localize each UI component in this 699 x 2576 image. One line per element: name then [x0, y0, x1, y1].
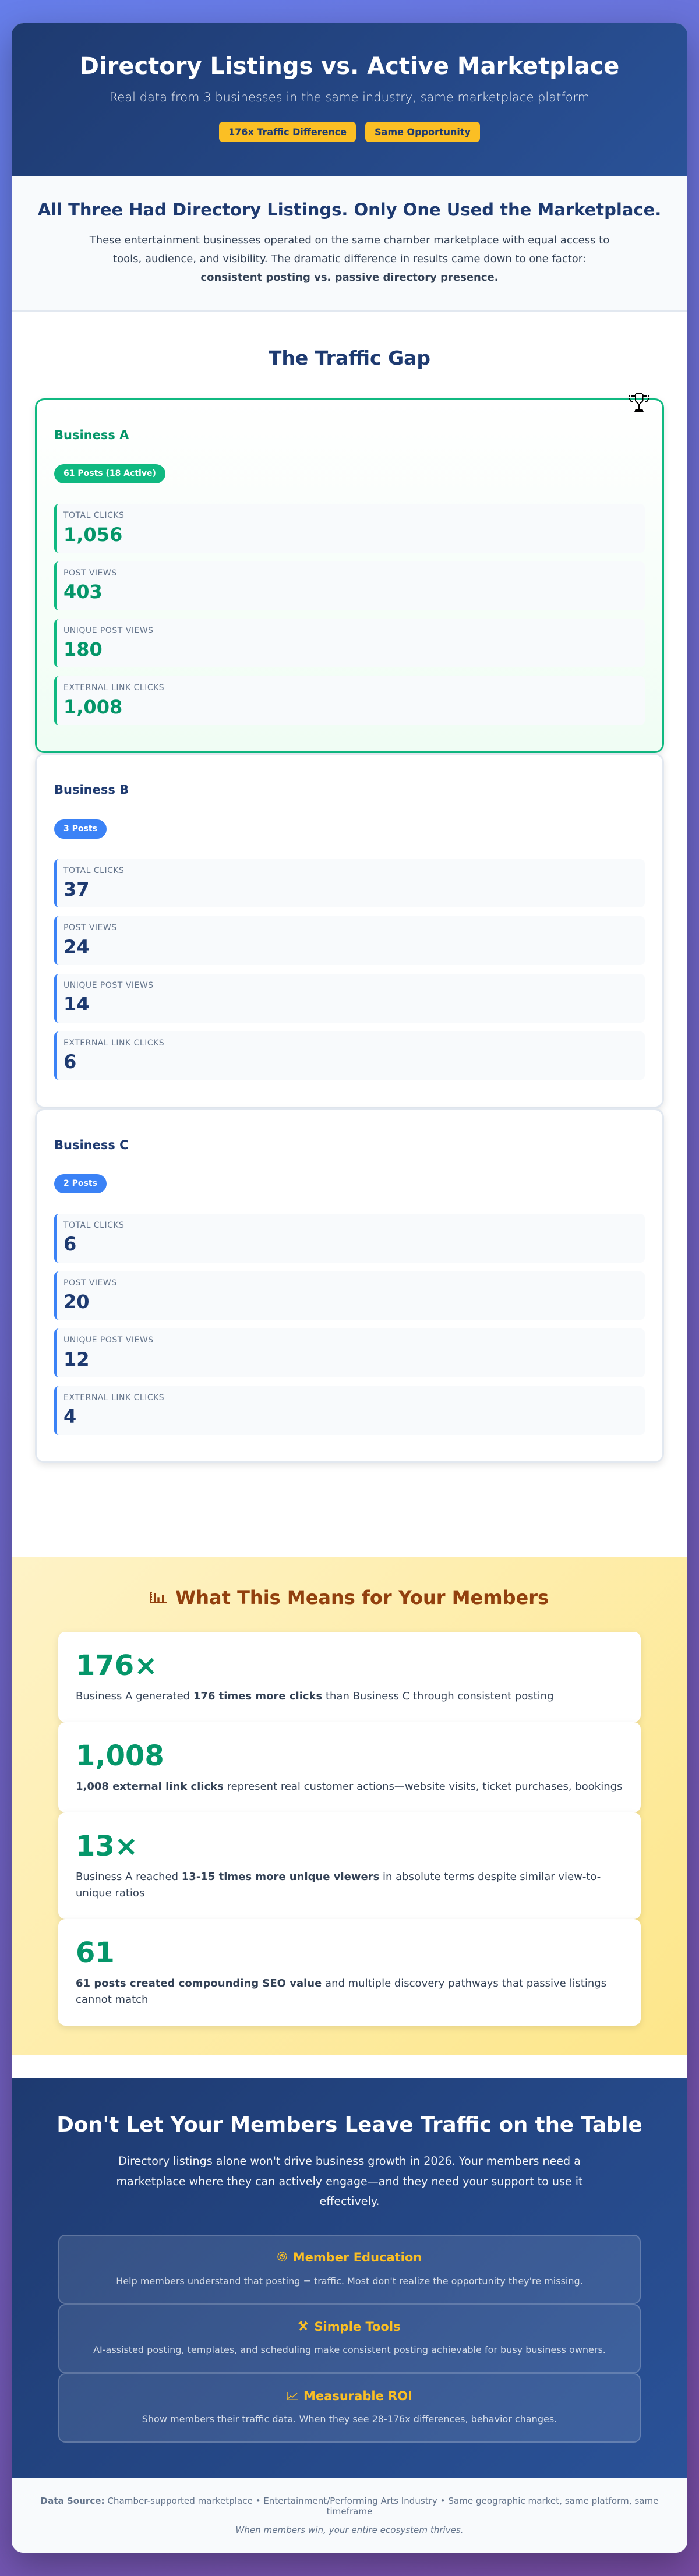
- intro heading: All Three Had Directory Listings. Only One Used the Marketplace.: [38, 200, 661, 220]
- metric: total clicks: [54, 504, 645, 553]
- action: member education: [58, 2235, 641, 2304]
- metric: total clicks: 1,056: [63, 524, 122, 546]
- subtitle: Real data from 3 businesses in the same industry, same marketplace platform: [110, 90, 589, 104]
- card: business A: [35, 398, 664, 753]
- metric: total clicks: TOTAL CLICKS: [63, 511, 124, 520]
- intro text: These entertainment businesses operated on the same chamber marketplace with equal access to: [90, 234, 609, 246]
- business A metrics: [54, 504, 164, 725]
- business B name: Business B: [54, 783, 129, 797]
- insight: 13x: [58, 1812, 641, 1919]
- intro text: consistent posting vs. passive directory presence.: [200, 271, 499, 284]
- business B post badge: [54, 819, 107, 839]
- CTA text: effectively.: [320, 2195, 379, 2208]
- CTA text: Directory listings alone won't drive business growth in 2026. Your members need a: [118, 2154, 581, 2168]
- metric: external link clicks: [54, 676, 645, 725]
- metric: unique post views: [54, 619, 645, 667]
- CTA text: marketplace where they can actively engage—and they need your support to use it: [116, 2175, 583, 2188]
- metric: post views: 403: [63, 581, 103, 603]
- metric: total clicks: TOTAL CLICKS: [63, 1221, 124, 1230]
- tag: traffic difference: 176x Traffic Difference: [228, 126, 347, 137]
- tag: same opportunity: [365, 122, 480, 142]
- panel: what this means: [12, 1557, 687, 2055]
- business B post badge: 3 Posts: [63, 824, 97, 833]
- business A post badge: 61 Posts (18 Active): [63, 469, 156, 478]
- metric: total clicks: [54, 1214, 645, 1263]
- business C post badge: 2 Posts: [63, 1179, 97, 1188]
- stat description: unique ratios: [76, 1887, 144, 1899]
- stat description: Business A generated 176 times more clicks than Business C through consistent posting: [76, 1690, 554, 1702]
- section heading with chart icon: What This Means for Your Members: [175, 1586, 549, 1609]
- business C name: Business C: [54, 1138, 129, 1152]
- stat description: cannot match: [76, 1994, 148, 2006]
- metric: unique post views: 14: [63, 993, 90, 1015]
- metric: unique post views: 12: [63, 1348, 90, 1370]
- tag: same opportunity: Same Opportunity: [375, 126, 471, 137]
- intro text: [90, 234, 609, 284]
- metric: unique post views: [54, 1328, 645, 1377]
- data source: Data Source: Chamber-supported marketplace • Entertainment/Performing Arts Industry • Same geographic market, same platform, same: [41, 2496, 658, 2506]
- action text: AI-assisted posting, templates, and scheduling make consistent posting achievable for busy business owners.: [93, 2344, 606, 2355]
- closing line: When members win, your entire ecosystem thrives.: [235, 2525, 464, 2535]
- metric: external link clicks: 6: [63, 1051, 76, 1073]
- metric: external link clicks: [54, 1386, 645, 1435]
- action text: Help members understand that posting = traffic. Most don't realize the opportunity they're missing.: [116, 2275, 583, 2287]
- stat description: [76, 1871, 601, 1899]
- metric: total clicks: TOTAL CLICKS: [63, 866, 124, 875]
- stat: 1,008: [76, 1740, 164, 1772]
- panel: call to action: [12, 2078, 687, 2478]
- action title with growth chart icon: Measurable ROI: [303, 2389, 412, 2403]
- metric: external link clicks: [54, 1031, 645, 1080]
- footer: [12, 2478, 687, 2553]
- insight: 61: [58, 1919, 641, 2026]
- metric: total clicks: 37: [63, 878, 90, 900]
- business A post badge: [54, 464, 165, 483]
- CTA text: [116, 2154, 583, 2208]
- CTA heading: Don't Let Your Members Leave Traffic on the Table: [57, 2113, 642, 2137]
- metric: external link clicks: EXTERNAL LINK CLICKS: [63, 1393, 164, 1402]
- insight: 176x: [58, 1632, 641, 1722]
- metric: unique post views: [54, 974, 645, 1023]
- business C post badge: [54, 1174, 107, 1193]
- action: measurable ROI: [58, 2373, 641, 2443]
- metric: post views: 20: [63, 1291, 90, 1313]
- metric: total clicks: [54, 859, 645, 907]
- icon: trophy: [629, 393, 649, 412]
- metric: external link clicks: 1,008: [63, 696, 122, 718]
- action: simple tools: [58, 2304, 641, 2373]
- business B metrics: [54, 859, 164, 1080]
- action text: Show members their traffic data. When they see 28-176x differences, behavior changes.: [142, 2414, 557, 2425]
- metric: external link clicks: EXTERNAL LINK CLICKS: [63, 1038, 164, 1048]
- metric: post views: [54, 916, 645, 965]
- action title with tools icon: Simple Tools: [314, 2320, 401, 2334]
- metric: post views: POST VIEWS: [63, 568, 117, 578]
- stat description: 61 posts created compounding SEO value and multiple discovery pathways that passive listings: [76, 1977, 606, 1990]
- metric: post views: 24: [63, 936, 90, 958]
- tag: traffic difference: [219, 122, 356, 142]
- metric: external link clicks: 4: [63, 1405, 76, 1427]
- business C metrics: [54, 1214, 164, 1435]
- intro text: tools, audience, and visibility. The dramatic difference in results came down to one factor:: [113, 253, 586, 265]
- panel: the traffic gap: [34, 347, 665, 1467]
- metric: unique post views: UNIQUE POST VIEWS: [63, 626, 154, 635]
- metric: post views: POST VIEWS: [63, 923, 117, 932]
- metric: post views: [54, 561, 645, 610]
- stat description: 1,008 external link clicks represent real customer actions—website visits, ticket purchases, bookings: [76, 1780, 622, 1793]
- panel: intro: [12, 176, 687, 312]
- title: Directory Listings vs. Active Marketplace: [80, 53, 619, 80]
- metric: post views: [54, 1271, 645, 1320]
- metric: external link clicks: EXTERNAL LINK CLICKS: [63, 683, 164, 692]
- header panel: [12, 23, 687, 176]
- business A name: Business A: [54, 428, 129, 442]
- card: business B: [35, 753, 664, 1108]
- card: business C: [35, 1108, 664, 1463]
- insight: 1,008: [58, 1722, 641, 1812]
- stat: 61: [76, 1937, 115, 1969]
- metric: total clicks: 6: [63, 1233, 76, 1255]
- stat description: [76, 1977, 606, 2006]
- stat description: Business A reached 13-15 times more unique viewers in absolute terms despite similar view-to-: [76, 1871, 601, 1883]
- header tags: [219, 122, 480, 142]
- action title with target icon: Member Education: [293, 2250, 422, 2264]
- data source: [41, 2496, 658, 2517]
- section heading: The Traffic Gap: [269, 347, 430, 369]
- metric: unique post views: UNIQUE POST VIEWS: [63, 1335, 154, 1345]
- metric: unique post views: UNIQUE POST VIEWS: [63, 981, 154, 990]
- stat: 13×: [76, 1830, 138, 1863]
- data source: timeframe: [327, 2506, 372, 2517]
- metric: unique post views: 180: [63, 638, 103, 660]
- stat: 176×: [76, 1649, 157, 1682]
- metric: post views: POST VIEWS: [63, 1278, 117, 1288]
